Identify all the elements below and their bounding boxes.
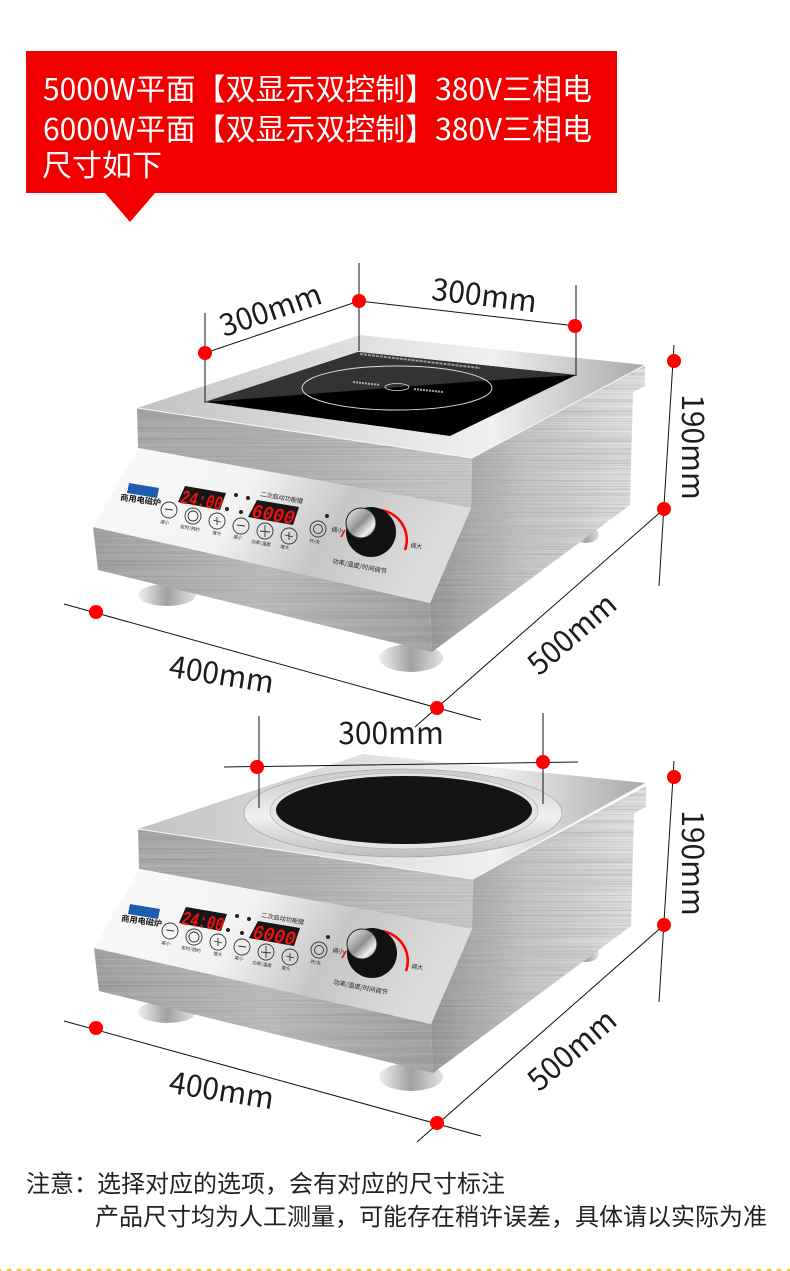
flat induction cooker — [93, 335, 645, 672]
label 300mm right: 300mm — [430, 265, 540, 321]
banner line 1: 5000W平面【双显示双控制】380V三相电 — [43, 65, 592, 109]
panel small labels: 定时/预约 — [181, 944, 202, 954]
indicator dots — [225, 493, 329, 518]
note line 1 label: 注意： — [26, 1164, 98, 1199]
dimension lines — [64, 713, 674, 1142]
panel small labels: 调小 — [332, 945, 345, 956]
dimension dots — [89, 294, 681, 715]
panel small labels: 增大 — [213, 950, 223, 959]
label 300mm left: 300mm — [213, 270, 327, 346]
indicator dots — [226, 914, 330, 939]
brand name: 商用电磁炉 — [120, 491, 162, 509]
black glass plate — [205, 352, 576, 436]
panel small labels: 功率/温度/时间调节 — [332, 556, 388, 576]
upper rim front — [137, 408, 472, 508]
panel small labels: 调大 — [411, 961, 424, 972]
panel small labels: 二次启动功能键 — [260, 489, 304, 505]
yellow dotted border — [0, 1268, 790, 1271]
note line 2: 产品尺寸均为人工测量，可能存在稍许误差，具体请以实际为准 — [95, 1197, 767, 1232]
panel small labels: 调大 — [410, 540, 423, 551]
top surface — [137, 335, 645, 458]
top surface — [138, 754, 646, 879]
feet — [138, 946, 599, 1091]
touch buttons — [161, 502, 326, 544]
lower front face — [93, 527, 432, 652]
panel small labels: 定时/预约 — [180, 523, 201, 533]
panel small labels: 减小 — [234, 954, 244, 963]
timer display — [178, 486, 226, 517]
label 500mm: 500mm — [516, 997, 625, 1099]
brand logo — [128, 904, 160, 919]
power display: 6000 — [250, 501, 296, 531]
wok inner ring — [270, 773, 538, 849]
panel small labels: 二次启动功能键 — [261, 910, 305, 926]
dimensions for flat cooker — [64, 263, 717, 727]
label 400mm: 400mm — [166, 1058, 278, 1118]
timer display: 24:00 — [180, 908, 225, 938]
upper rim front — [138, 829, 473, 929]
label 190mm: 190mm — [673, 810, 717, 916]
panel small labels: 开/关 — [309, 537, 321, 546]
panel small labels: 减小 — [233, 533, 243, 542]
panel small labels: 功率/温度 — [251, 538, 272, 548]
panel small labels — [160, 489, 423, 576]
touch buttons — [162, 923, 327, 965]
power display: 6000 — [251, 922, 297, 952]
control panel — [93, 448, 471, 603]
dimensions for wok cooker — [64, 709, 717, 1142]
right side face — [430, 365, 645, 652]
panel small labels: 增大 — [212, 529, 222, 538]
banner line 2: 6000W平面【双显示双控制】380V三相电 — [43, 105, 592, 149]
feet — [138, 527, 599, 672]
timer display — [179, 907, 227, 938]
brand logo — [127, 483, 159, 498]
note line 1 body: 选择对应的选项，会有对应的尺寸标注 — [97, 1164, 505, 1199]
timer display: 24:00 — [179, 487, 224, 517]
panel small labels: 减小 — [161, 939, 171, 948]
label 300mm: 300mm — [338, 709, 444, 753]
label 400mm: 400mm — [166, 642, 278, 702]
control knob — [342, 928, 408, 978]
panel small labels: 减小 — [160, 518, 170, 527]
panel small labels: 增大 — [280, 543, 290, 552]
label 190mm: 190mm — [673, 394, 717, 500]
note text — [26, 1164, 767, 1232]
heating ring — [302, 366, 492, 410]
label 500mm: 500mm — [516, 581, 625, 683]
brand name: 商用电磁炉 — [121, 912, 163, 930]
panel small labels: 调小 — [331, 524, 344, 535]
control panel — [94, 869, 472, 1024]
panel small labels: 功率/温度/时间调节 — [333, 977, 389, 997]
panel small labels: 增大 — [281, 964, 291, 973]
wok induction cooker — [94, 754, 646, 1091]
dimension dots — [89, 755, 681, 1130]
right side face — [431, 786, 646, 1073]
control knob — [341, 507, 407, 557]
red banner — [26, 51, 617, 222]
panel small labels: 开/关 — [310, 958, 322, 967]
panel small labels: 功率/温度 — [252, 959, 273, 969]
black wok bowl — [276, 776, 532, 844]
panel small labels — [161, 910, 424, 997]
banner line 3: 尺寸如下 — [42, 141, 162, 185]
wok outer ring — [244, 769, 562, 857]
dimension lines — [64, 263, 674, 727]
lower front face — [94, 948, 433, 1073]
